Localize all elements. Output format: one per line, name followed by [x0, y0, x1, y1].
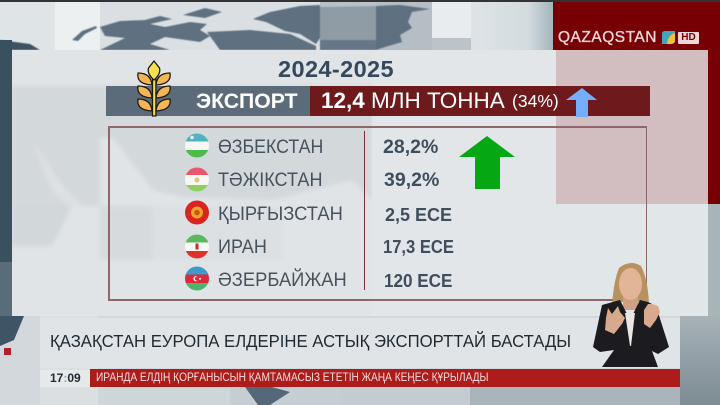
neck	[623, 294, 638, 310]
main translucent panel	[12, 50, 708, 316]
logo HD badge	[678, 32, 699, 44]
export label: ЭКСПОРТ	[196, 90, 298, 113]
lower band	[0, 316, 720, 405]
logo text: QAZAQSTAN	[558, 29, 657, 46]
flag: Iran	[185, 234, 209, 258]
label: ҚЫРҒЫЗСТАН	[218, 203, 343, 225]
right hand	[644, 304, 660, 328]
icon: blue up arrow	[566, 88, 597, 117]
flag: Uzbekistan	[185, 134, 209, 158]
clock text: 17:09	[50, 371, 81, 385]
export bar	[106, 86, 650, 116]
logo: QAZAQSTAN HD	[558, 29, 699, 46]
top right strip	[320, 2, 376, 50]
ticker text: ИРАНДА ЕЛДІҢ ҚОРҒАНЫСЫН ҚАМТАМАСЫЗ ЕТЕТІН ЖАҢА КЕҢЕС ҚҰРЫЛАДЫ	[96, 371, 489, 384]
label: ӘЗЕРБАЙЖАН	[218, 269, 347, 291]
headline strip	[40, 318, 680, 368]
clock	[40, 370, 90, 387]
value: 2,5 ЕСЕ	[385, 205, 452, 225]
row: Azerbaijan	[185, 266, 452, 291]
row: Kyrgyzstan	[185, 200, 452, 225]
row: Iran	[185, 234, 454, 258]
label: ИРАН	[218, 236, 267, 258]
flag: Azerbaijan	[185, 266, 209, 290]
right grey column	[708, 204, 720, 316]
flag: Kyrgyzstan	[185, 200, 209, 224]
sign language interpreter	[593, 263, 669, 367]
row: Tajikistan	[185, 168, 439, 192]
panel background tint blocks	[13, 50, 708, 258]
table frame	[108, 126, 647, 301]
year heading: 2024-2025	[278, 56, 394, 82]
flag: Tajikistan	[185, 168, 209, 192]
value: 39,2%	[384, 169, 439, 191]
red corner panel	[553, 2, 720, 204]
left edge dark strip	[0, 40, 12, 262]
left hand	[605, 306, 625, 334]
face	[619, 268, 642, 300]
row: Uzbekistan	[185, 134, 438, 158]
column divider	[364, 131, 365, 290]
value: 17,3 ЕСЕ	[383, 237, 454, 257]
hair	[612, 263, 649, 304]
logo mark	[662, 31, 675, 44]
icon: wheat	[137, 60, 171, 117]
map	[0, 5, 430, 50]
jacket	[593, 300, 669, 367]
value: 28,2%	[383, 136, 438, 158]
blouse	[625, 313, 635, 346]
logo HD badge: HD	[681, 32, 696, 43]
icon: green up arrow	[459, 136, 515, 189]
export value segment	[310, 86, 650, 116]
news ticker	[90, 369, 680, 387]
label: ТӘЖІКСТАН	[218, 169, 322, 191]
label: ӨЗБЕКСТАН	[218, 136, 323, 158]
value: 120 ЕСЕ	[384, 271, 452, 291]
headline text: ҚАЗАҚСТАН ЕУРОПА ЕЛДЕРІНЕ АСТЫҚ ЭКСПОРТТАЙ БАСТАДЫ	[50, 331, 571, 351]
export value: 12,4 МЛН ТОННА (34%)	[321, 88, 559, 113]
